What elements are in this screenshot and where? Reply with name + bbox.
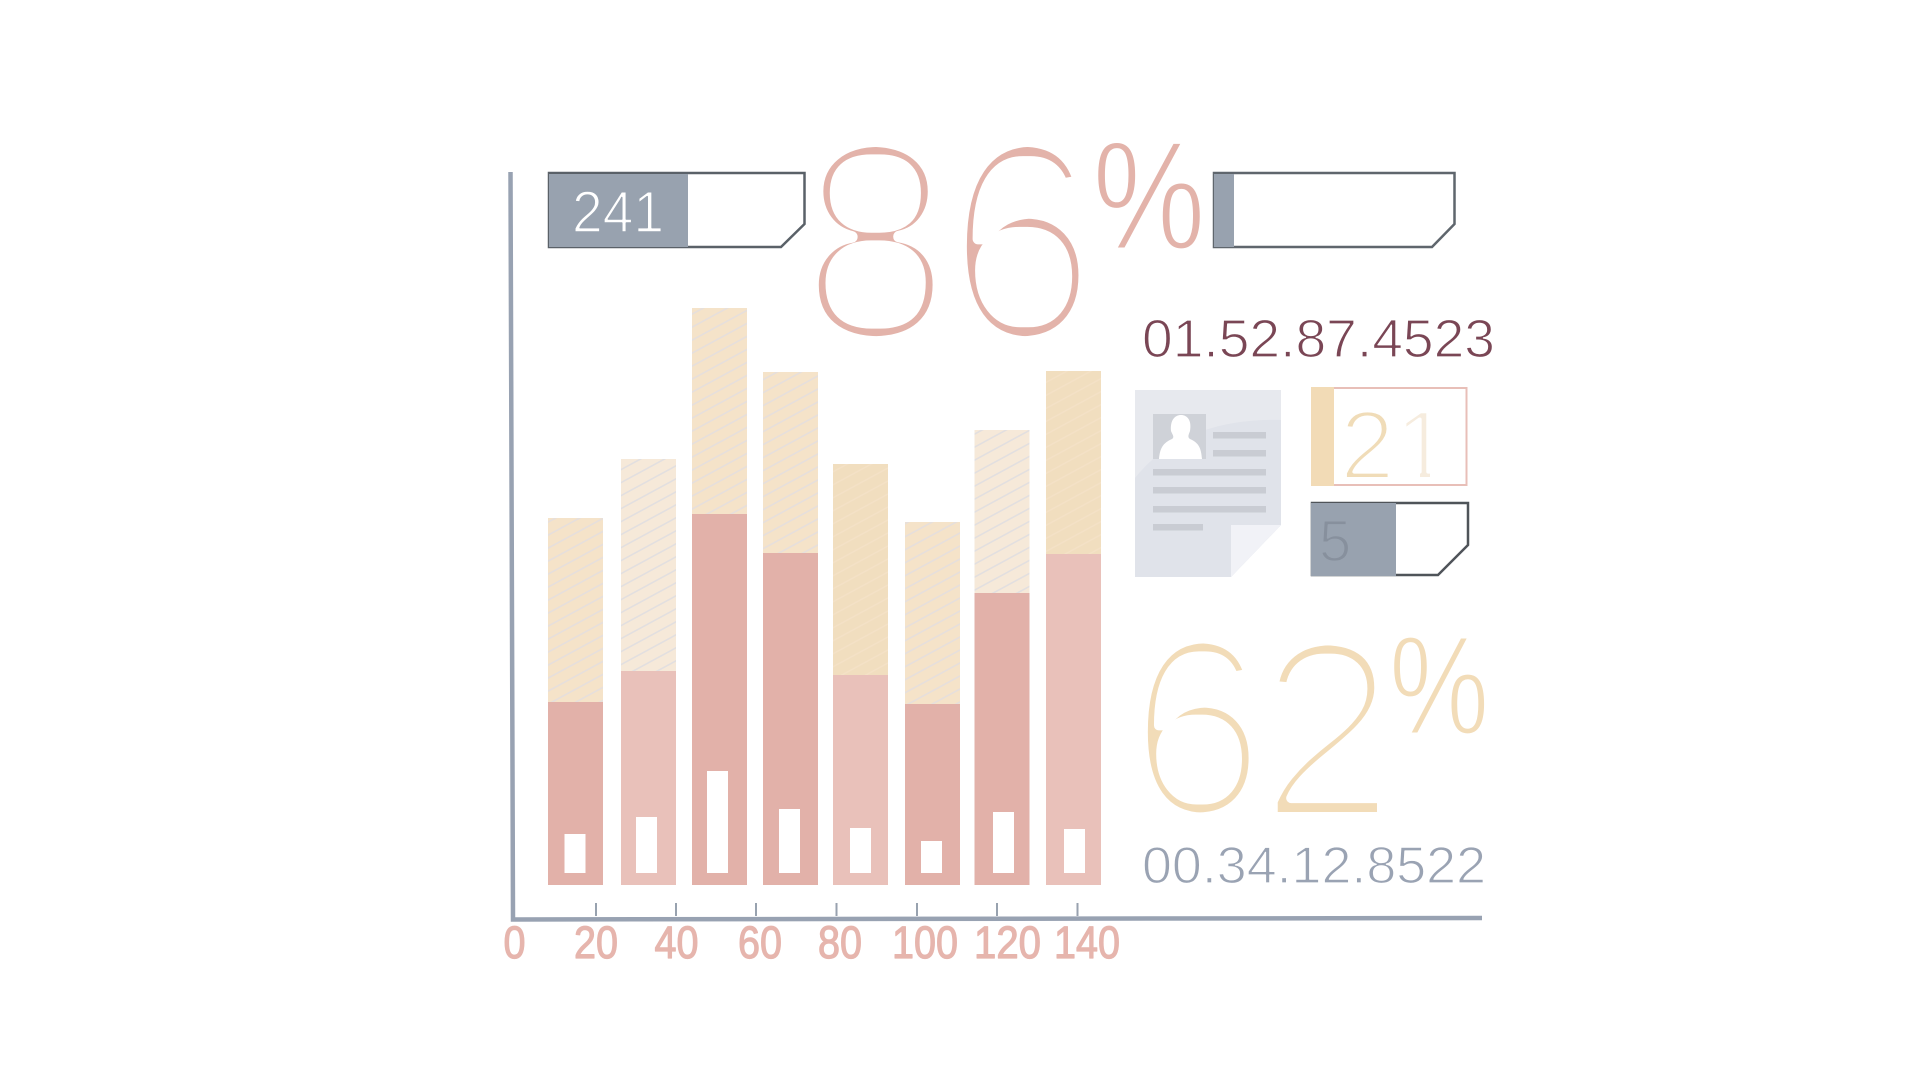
progress box: empty	[1214, 173, 1454, 247]
progress box: 5	[1311, 503, 1468, 576]
value 241: 241	[572, 180, 664, 245]
axis labels: 100	[892, 917, 958, 968]
chart axes	[510, 172, 1482, 920]
bar chart	[548, 308, 1101, 885]
big number: 62%	[1127, 586, 1489, 871]
bar 6	[905, 522, 960, 885]
bar 2	[621, 459, 676, 885]
value 5: 5	[1319, 509, 1351, 574]
big number: 86%: 8	[797, 83, 954, 399]
axis labels: 80	[818, 917, 862, 968]
big number: 86%	[797, 83, 1206, 399]
bar 4	[763, 372, 818, 885]
axis labels: 120	[974, 917, 1041, 968]
value 21	[1340, 390, 1450, 500]
axis labels: 40	[654, 917, 698, 968]
bar 7	[974, 430, 1030, 885]
counter box: 21	[1311, 387, 1466, 500]
phone number: 00.34.12.8522: 00.34.12.8522	[1142, 837, 1486, 895]
big number: 86%: 6	[943, 83, 1100, 399]
progress box: 241	[549, 173, 804, 247]
axis ticks	[595, 903, 1078, 916]
axis labels: 20	[574, 917, 618, 968]
big number: 62%: 2	[1257, 588, 1398, 871]
big number: 86%: %	[1092, 110, 1206, 283]
bar 1	[548, 518, 603, 885]
icon: resume document	[1135, 390, 1281, 577]
value 21: 2	[1340, 390, 1395, 500]
value 21: 1	[1395, 390, 1450, 500]
bar 5	[833, 464, 888, 885]
axis labels: 0	[504, 917, 526, 968]
phone number: 01.52.87.4523: 01.52.87.4523	[1142, 309, 1495, 369]
big number: 62%: 6	[1127, 586, 1268, 869]
bar 3	[692, 308, 747, 885]
axis labels: 140	[1054, 917, 1120, 968]
axis labels	[504, 917, 1120, 968]
bar 8	[1046, 371, 1101, 885]
axis labels: 60	[738, 917, 782, 968]
big number: 62%: %	[1389, 607, 1489, 765]
